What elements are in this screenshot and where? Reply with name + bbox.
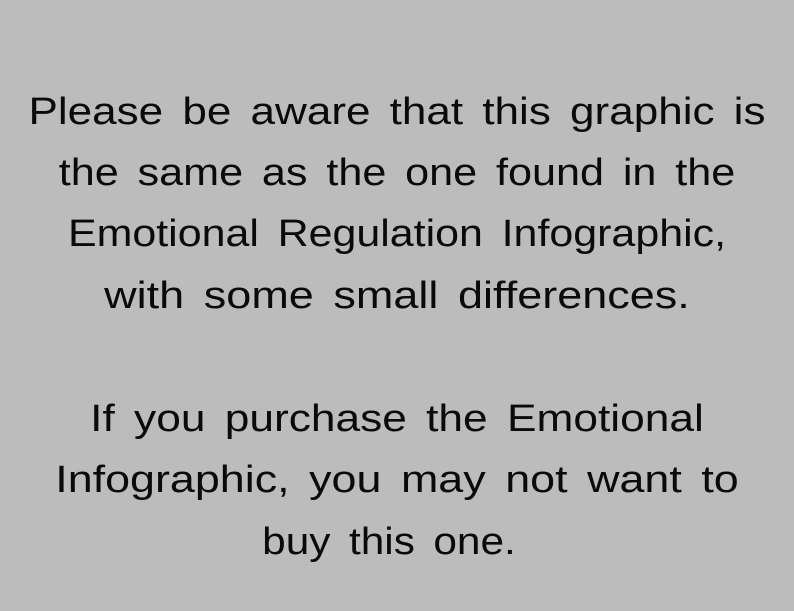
line 4: with some small differences. bbox=[104, 275, 690, 317]
text block: first notice bbox=[28, 91, 766, 317]
text block: second notice bbox=[55, 398, 739, 563]
line 1: Please be aware that this graphic is bbox=[28, 91, 766, 133]
line 5: If you purchase the Emotional bbox=[90, 398, 704, 440]
line 3: Emotional Regulation Infographic, bbox=[68, 213, 726, 255]
line 2: the same as the one found in the bbox=[59, 152, 735, 194]
line 7: buy this one. bbox=[262, 521, 516, 563]
line 6: Infographic, you may not want to bbox=[55, 459, 739, 501]
